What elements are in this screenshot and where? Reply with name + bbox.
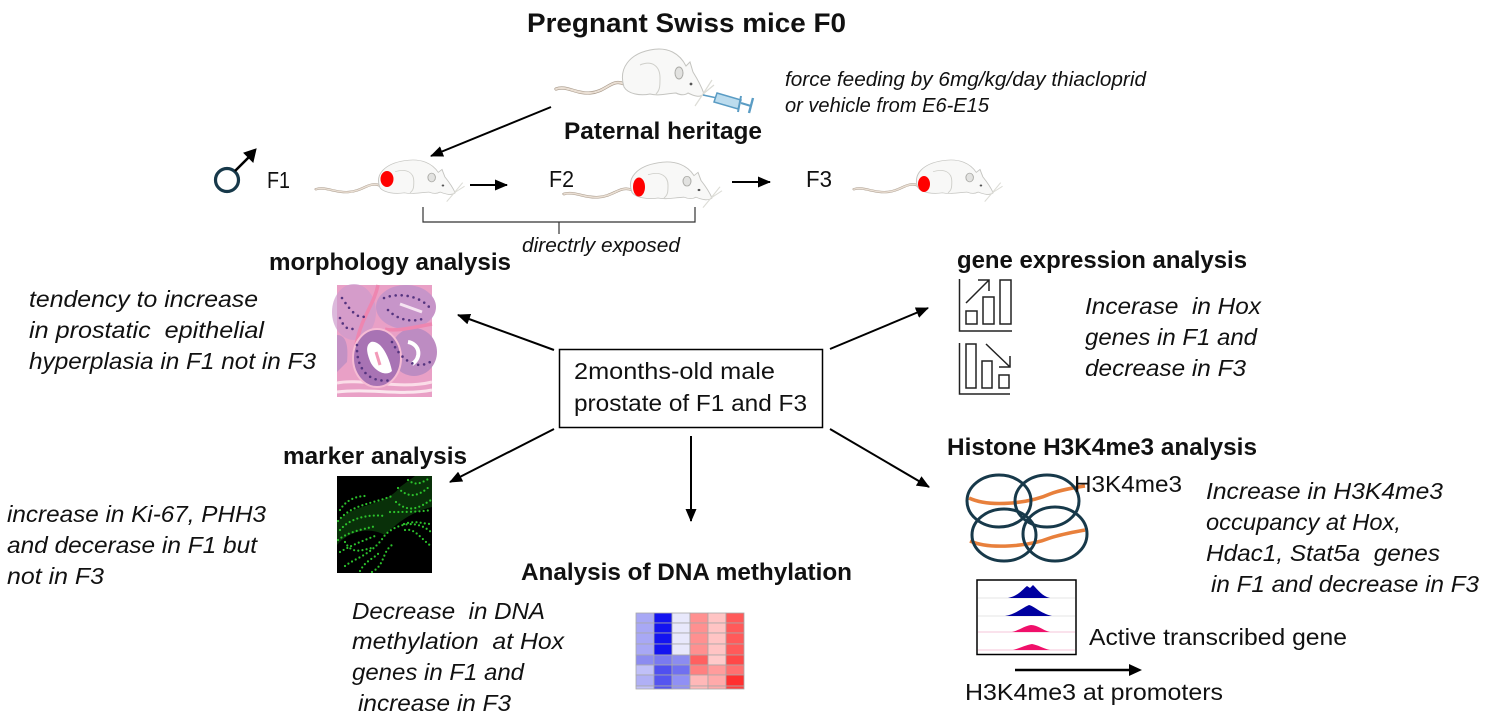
treatment note: force feeding by 6mg/kg/day thiacloprid: [785, 69, 1147, 91]
text: histone finding: occupancy at Hox,: [1206, 509, 1401, 535]
text: histone finding: [1206, 478, 1479, 597]
icon: chromatin nucleosomes: [967, 475, 1087, 561]
panel: gene expression analysis: [957, 247, 1262, 394]
text: gene expression finding: [1085, 293, 1262, 381]
text: marker finding: [7, 501, 266, 589]
icon: pregnant F0 mouse with syringe: [556, 49, 753, 113]
bracket: directly exposed generations: [423, 207, 695, 234]
text: morphology finding: in prostatic epithelial: [29, 317, 265, 343]
icon: syringe: [703, 93, 753, 113]
arrow: F1 to F2: [470, 184, 507, 186]
panel: DNA methylation analysis: [352, 559, 852, 716]
treatment note: [785, 69, 1147, 117]
panel: morphology analysis: [29, 249, 511, 397]
arrow: to morphology: [458, 315, 554, 350]
text: gene expression finding: Incerase in Hox: [1085, 293, 1262, 319]
heatmap: [636, 613, 744, 689]
bracket label: directrly exposed: [522, 235, 681, 257]
panel: central sample box: 2months-old male: [574, 358, 775, 384]
text: methylation finding: increase in F3: [358, 690, 511, 716]
heading: analysis of DNA methylation: Analysis of DNA methylation: [521, 559, 852, 586]
arrow: F0 to F1: [431, 107, 551, 156]
label: H3K4me3 at promoters: H3K4me3 at promoters: [965, 679, 1223, 705]
text: morphology finding: tendency to increase: [29, 286, 258, 312]
text: methylation finding: Decrease in DNA: [352, 598, 545, 624]
heading: marker analysis: marker analysis: [283, 443, 467, 470]
panel: central sample box: [560, 350, 822, 428]
text: histone finding: in F1 and decrease in F3: [1211, 571, 1479, 597]
icon: falling bar chart: [960, 343, 1010, 394]
arrow: F2 to F3: [732, 181, 770, 183]
arrow: to DNA methylation: [690, 436, 692, 521]
text: methylation finding: methylation at Hox: [352, 628, 565, 654]
text: marker finding: increase in Ki-67, PHH3: [7, 501, 266, 527]
heading: paternal heritage: Paternal heritage: [564, 118, 762, 145]
arrow: to marker analysis: [450, 429, 554, 482]
text: methylation finding: genes in F1 and: [352, 659, 525, 685]
panel: marker analysis: [7, 443, 467, 589]
label: H3K4me3: H3K4me3: [1074, 471, 1182, 497]
image: fluorescence micrograph: [337, 476, 432, 573]
text: marker finding: not in F3: [7, 563, 104, 589]
text: morphology finding: [29, 286, 316, 374]
text: gene expression finding: genes in F1 and: [1085, 324, 1258, 350]
icon: F3 mouse with prostate: [854, 160, 1003, 202]
heading: gene expression analysis: gene expression analysis: [957, 247, 1247, 274]
text: histone finding: Increase in H3K4me3: [1206, 478, 1443, 504]
icon: F1 mouse with prostate: [316, 160, 465, 202]
icon: F2 mouse with prostate: [564, 162, 722, 208]
text: gene expression finding: decrease in F3: [1085, 355, 1246, 381]
icon: rising bar chart: [960, 279, 1012, 331]
chart: H3K4me3 signal tracks: [977, 580, 1076, 654]
icon: male symbol: [216, 149, 256, 192]
arrow: to histone analysis: [830, 429, 929, 487]
heading: histone analysis: Histone H3K4me3 analysis: [947, 434, 1257, 461]
treatment note: or vehicle from E6-E15: [785, 95, 990, 117]
label: F3: F3: [806, 166, 832, 192]
image: prostate histology: [332, 284, 437, 397]
title: Pregnant Swiss mice F0: [527, 8, 846, 38]
text: morphology finding: hyperplasia in F1 not in F3: [29, 348, 316, 374]
text: marker finding: and decerase in F1 but: [7, 532, 259, 558]
panel: central sample box: prostate of F1 and F3: [574, 390, 807, 416]
label: F1: F1: [267, 167, 290, 193]
label: active transcribed gene: Active transcribed gene: [1089, 624, 1347, 650]
heading: morphology analysis: morphology analysis: [269, 249, 511, 276]
panel: histone H3K4me3 analysis: [947, 434, 1479, 705]
arrow: to gene expression: [830, 308, 928, 349]
text: histone finding: Hdac1, Stat5a genes: [1206, 540, 1440, 566]
text: methylation finding: [352, 598, 565, 716]
arrow: promoter direction: [1015, 664, 1142, 676]
label: F2: F2: [549, 166, 574, 192]
